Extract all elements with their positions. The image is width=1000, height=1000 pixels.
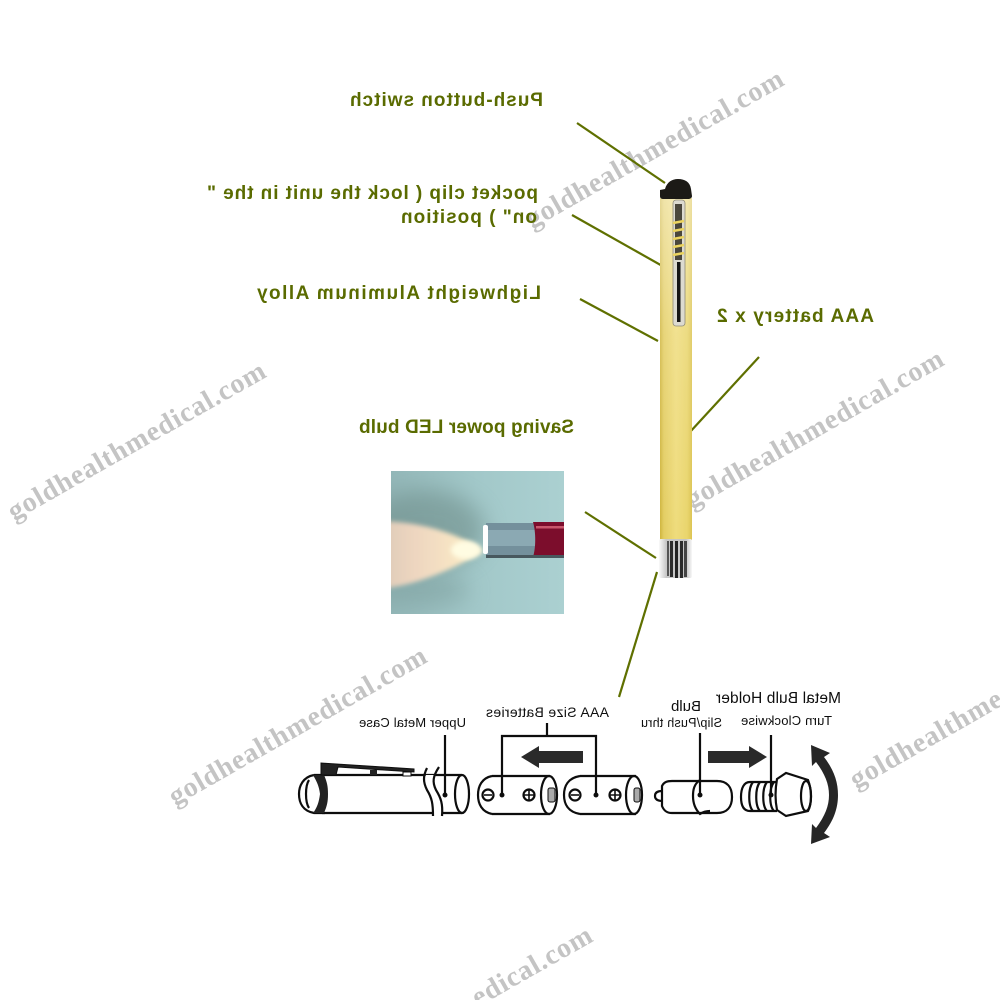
label: turn clockwise: Turn Clockwise: [741, 713, 832, 728]
arrow: rotation: [811, 745, 838, 844]
LED photo: [391, 471, 564, 614]
label: slip/push thru: Slip/Push thru: [641, 716, 722, 730]
battery bracket: [500, 723, 598, 798]
metal bulb holder: [741, 735, 811, 816]
label: push-button switch: Push-button switch: [350, 90, 543, 111]
break: [424, 775, 442, 815]
label: LED bulb: Saving power LED bulb: [359, 417, 574, 438]
watermark left: goldhealthmedical.com: [2, 355, 272, 527]
light beam: [380, 521, 483, 589]
pen head in photo: [483, 522, 564, 558]
arrow: right: [708, 746, 767, 768]
label: aluminum alloy: Lighweight Aluminum Alloy: [257, 283, 541, 304]
bright core: [451, 541, 481, 559]
label: pocket clip line 2: on" ) position: [401, 207, 537, 228]
clip: [321, 763, 414, 775]
leader lines: [572, 123, 759, 697]
battery left: [478, 776, 557, 814]
label: AAA battery: AAA battery x 2: [717, 306, 874, 327]
exploded assembly diagram: [299, 690, 841, 844]
label: metal bulb holder: Metal Bulb Holder: [716, 690, 841, 707]
battery right: [564, 776, 642, 814]
label: pocket clip line 1: pocket clip ( lock the unit in the ": [207, 183, 538, 204]
pen body: [660, 198, 692, 540]
watermark right: goldhealthmedical.com: [680, 343, 950, 515]
penlight: [659, 179, 692, 578]
upper metal case: [299, 735, 469, 816]
pointer: [444, 735, 446, 795]
label: upper metal case: Upper Metal Case: [359, 715, 466, 730]
bulb: [655, 733, 732, 814]
label: AAA size batteries: AAA Size Batteries: [486, 704, 609, 720]
dark halo around beam: [365, 490, 485, 570]
push button cap: [660, 179, 692, 199]
watermark top: goldhealthmedical.com: [520, 63, 790, 235]
watermark lower left: goldhealthmedical.com: [163, 640, 433, 812]
metal tip: [659, 539, 692, 578]
arrow: left: [521, 746, 583, 768]
pocket clip: [673, 200, 685, 326]
label: bulb: Bulb: [671, 698, 701, 715]
